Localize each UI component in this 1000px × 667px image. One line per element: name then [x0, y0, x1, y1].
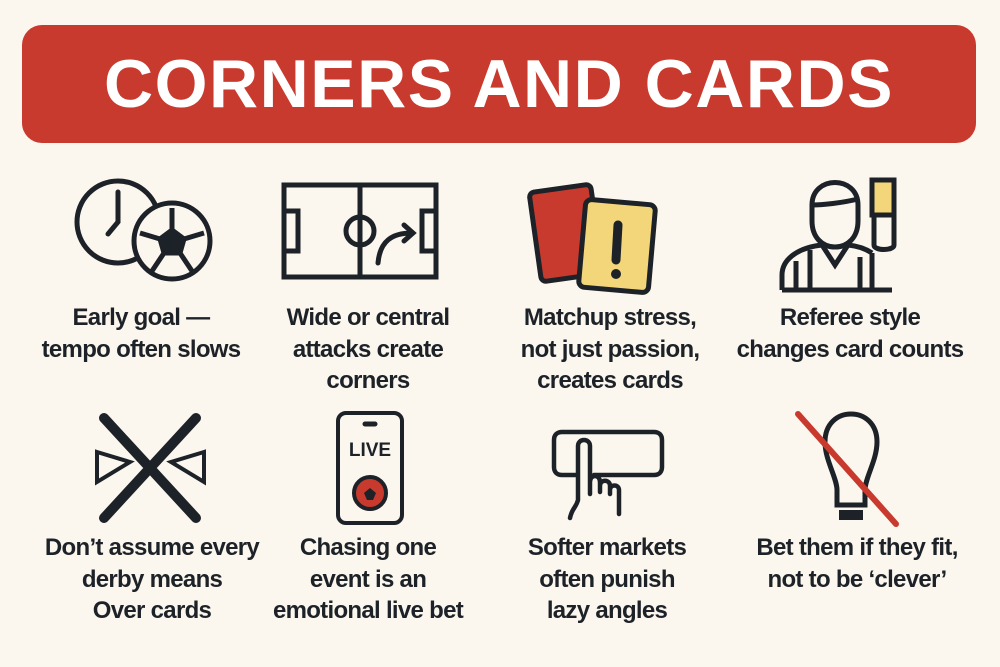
text: chasing: Chasing one — [300, 534, 436, 561]
text: derby: Don’t assume every — [45, 534, 259, 561]
text: wide or central: Wide or central — [287, 304, 449, 331]
text: chasing: event is an — [310, 566, 426, 592]
text: softer markets: lazy angles — [547, 597, 667, 624]
text: chasing: emotional live bet — [273, 597, 463, 624]
icon: crossed bulb — [795, 411, 899, 527]
text: referee style — [737, 304, 964, 362]
title banner: CORNERS AND CARDS — [104, 46, 894, 122]
text: matchup stress: creates cards — [537, 367, 683, 394]
text: derby: Over cards — [93, 597, 211, 624]
text: referee style: changes card counts — [737, 336, 963, 362]
text: bet them — [756, 534, 958, 592]
text: early goal — [42, 304, 240, 362]
text: bet them: not to be ‘clever’ — [767, 566, 946, 592]
text: early goal: Early goal — — [72, 304, 209, 331]
text: early goal: tempo often slows — [42, 336, 240, 362]
text: matchup stress: not just passion, — [521, 336, 699, 362]
icon: pitch with arrow — [282, 182, 438, 280]
icon: referee — [780, 178, 896, 292]
text: bet them: Bet them if they fit, — [756, 534, 958, 561]
text: softer markets — [528, 534, 686, 624]
text: softer markets: Softer markets — [528, 534, 686, 561]
text: wide or central — [286, 304, 449, 394]
text: referee style: Referee style — [780, 304, 920, 331]
text: matchup stress — [521, 304, 699, 394]
text: matchup stress: Matchup stress, — [524, 304, 696, 331]
text: wide or central: attacks create — [293, 336, 443, 362]
icon: red and yellow cards — [527, 182, 658, 295]
text: derby — [45, 534, 260, 624]
text: derby: derby means — [82, 566, 222, 592]
icon: clock and ball — [74, 178, 212, 282]
text: softer markets: often punish — [539, 566, 675, 592]
text: chasing — [273, 534, 464, 624]
icon: phone live — [336, 411, 404, 525]
icon: phone live: LIVE — [349, 440, 391, 461]
text: wide or central: corners — [326, 367, 410, 394]
title banner — [22, 25, 976, 143]
icon: crossed lines — [95, 413, 206, 523]
icon: finger button — [552, 430, 664, 520]
